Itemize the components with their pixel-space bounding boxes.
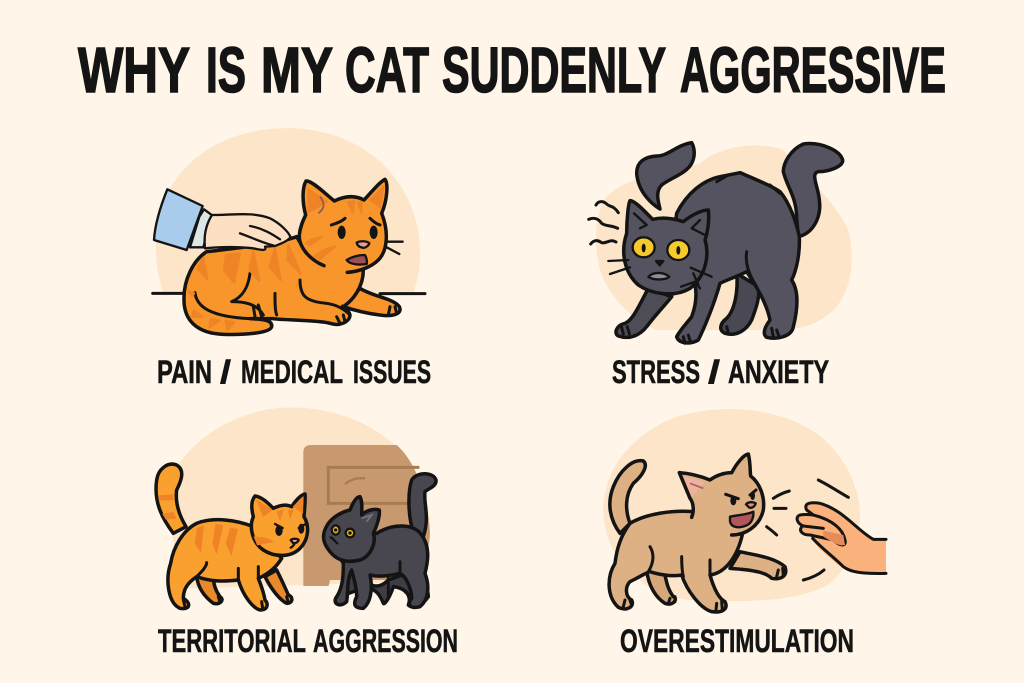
illustration: arched black cat: [589, 143, 852, 343]
title: [78, 34, 946, 106]
label: [157, 354, 431, 390]
label: OVERESTIMULATION: [620, 623, 854, 659]
label: TERRITORIAL: [158, 623, 306, 659]
label: ISSUES: [353, 354, 431, 390]
title: MY: [261, 34, 333, 106]
icon: reaching hand: [796, 503, 886, 573]
title: SUDDENLY: [442, 34, 666, 106]
label: MEDICAL: [241, 354, 343, 390]
panel: stress / anxiety: [589, 143, 852, 390]
label: PAIN: [157, 354, 212, 390]
icon: cabinet: [303, 445, 430, 586]
panel: overestimulation: [603, 409, 886, 659]
label: ANXIETY: [728, 354, 829, 390]
panel: territorial aggression: [156, 407, 458, 659]
illustration: orange and black cats facing off: [156, 407, 436, 610]
title: IS: [206, 34, 246, 106]
illustration: orange cat being touched: [153, 128, 425, 334]
label: /: [708, 354, 720, 390]
label: [612, 354, 829, 390]
panel: pain / medical issues: [153, 128, 431, 390]
label: AGGRESSION: [313, 623, 458, 659]
title: WHY: [78, 34, 190, 106]
title: CAT: [345, 34, 429, 106]
label: STRESS: [612, 354, 700, 390]
illustration: cat swatting at hand: [603, 409, 886, 612]
label: /: [220, 354, 231, 390]
